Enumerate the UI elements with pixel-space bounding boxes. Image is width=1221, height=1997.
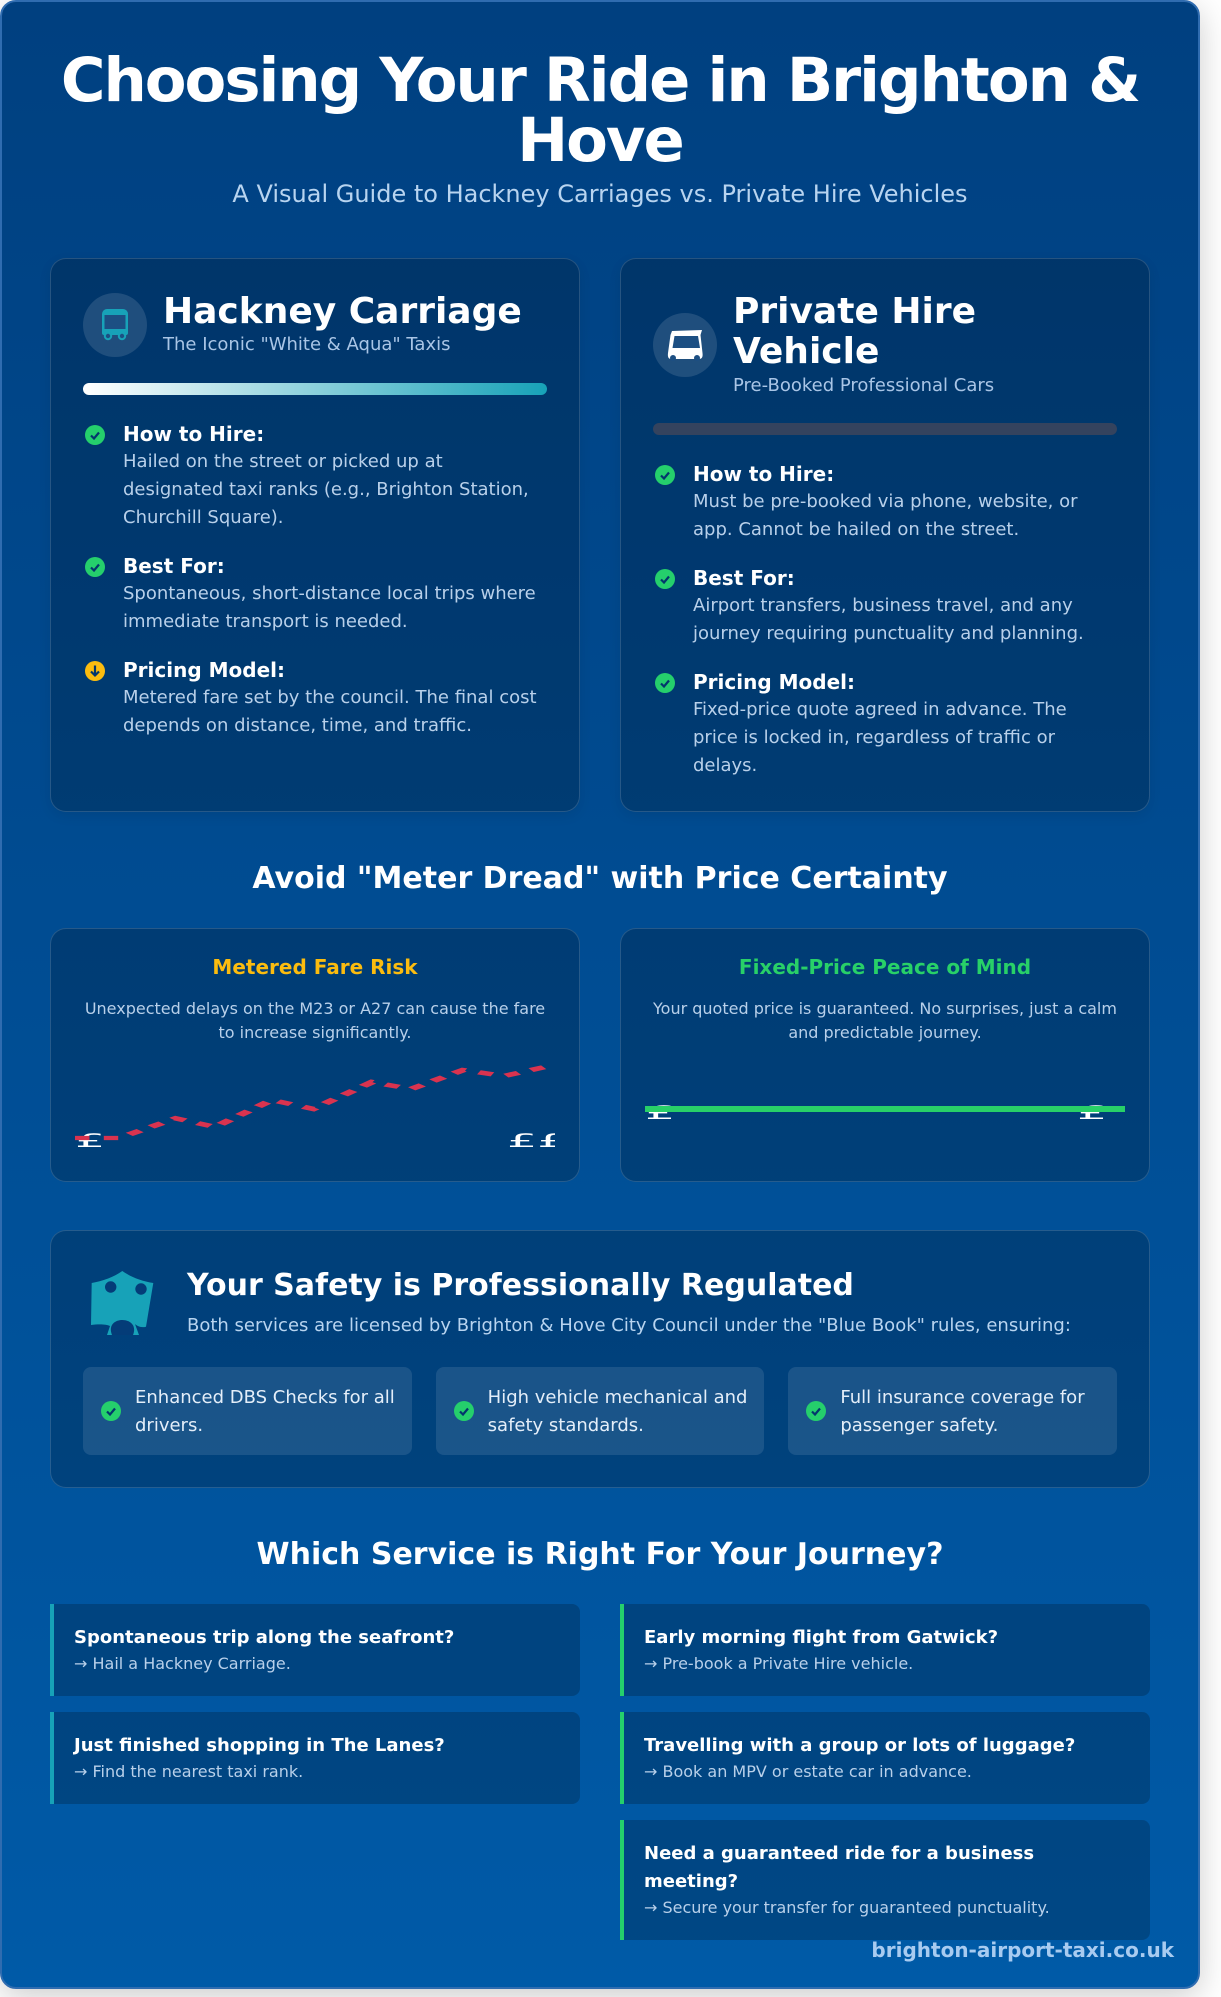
question: Need a guaranteed ride for a business — [644, 1843, 1034, 1864]
section heading: price certainty: Avoid "Meter Dread" with Price Certainty — [252, 861, 948, 896]
start price label: £ — [645, 1101, 675, 1124]
icon: bus — [83, 293, 147, 357]
panel: metered fare risk — [50, 928, 580, 1182]
item: pricing model — [655, 670, 1067, 776]
question: Early morning flight from Gatwick? — [644, 1627, 998, 1648]
heading: Vehicle — [733, 330, 879, 372]
icon: car — [653, 313, 717, 377]
colour bar — [653, 423, 1117, 435]
question: Just finished shopping in The Lanes? — [74, 1735, 445, 1756]
chart: rising fare line — [75, 1065, 555, 1152]
question: Spontaneous trip along the seafront? — [74, 1627, 454, 1648]
panel text: and predictable journey. — [788, 1023, 982, 1042]
description: delays. — [693, 755, 757, 776]
panel text: Unexpected delays on the M23 or A27 can cause the fare — [85, 999, 545, 1018]
colour bar — [83, 383, 547, 395]
description: Must be pre-booked via phone, website, or — [693, 491, 1078, 512]
icon: warning arrow — [85, 661, 105, 681]
icon: check — [85, 557, 105, 577]
text: Enhanced DBS Checks for all — [135, 1387, 395, 1408]
panel: safety — [50, 1230, 1150, 1488]
panel text: to increase significantly. — [218, 1023, 412, 1042]
label: Best For: — [123, 554, 225, 578]
answer: → Find the nearest taxi rank. — [74, 1762, 303, 1781]
description: Hailed on the street or picked up at — [123, 451, 443, 472]
title: Choosing Your Ride in Brighton & — [61, 46, 1139, 116]
panel: private hire vehicle — [620, 258, 1150, 812]
heading: Your Safety is Professionally Regulated — [187, 1268, 854, 1303]
answer: → Book an MPV or estate car in advance. — [644, 1762, 972, 1781]
answer: → Hail a Hackney Carriage. — [74, 1654, 291, 1673]
description: Airport transfers, business travel, and any — [693, 595, 1073, 616]
footer url: brighton-airport-taxi.co.uk — [871, 1938, 1174, 1962]
item: how to hire — [85, 422, 529, 528]
text — [840, 1387, 1085, 1436]
description: Metered fare set by the council. The final cost — [123, 687, 537, 708]
icon: check — [806, 1401, 826, 1421]
end price label: £ — [1077, 1101, 1107, 1124]
text — [135, 1387, 395, 1436]
description: journey requiring punctuality and planning. — [693, 623, 1084, 644]
description: depends on distance, time, and traffic. — [123, 715, 472, 736]
question: Travelling with a group or lots of luggage? — [644, 1735, 1075, 1756]
icon: check — [85, 425, 105, 445]
chart: flat price line — [645, 1101, 1125, 1124]
question — [644, 1843, 1034, 1892]
start price label: £ — [75, 1129, 105, 1152]
item: how to hire — [655, 462, 1078, 540]
scenario: gatwick — [620, 1604, 1150, 1696]
text: Both services are licensed by Brighton & Hove City Council under the "Blue Book" rules, ensuring: — [187, 1315, 1071, 1336]
label: Pricing Model: — [123, 658, 285, 682]
fare line — [75, 1065, 554, 1138]
text: safety standards. — [488, 1415, 644, 1436]
heading: Hackney Carriage — [163, 291, 522, 332]
scenario: business meeting — [620, 1820, 1150, 1940]
description — [123, 583, 536, 632]
description — [693, 491, 1078, 540]
description: Churchill Square). — [123, 507, 284, 528]
heading: Private Hire — [733, 291, 976, 332]
icon: shield — [91, 1271, 154, 1335]
description — [692, 595, 1084, 644]
description: immediate transport is needed. — [123, 611, 408, 632]
text: drivers. — [135, 1415, 203, 1436]
panel heading: Fixed-Price Peace of Mind — [739, 955, 1031, 979]
description — [123, 687, 537, 736]
answer: → Secure your transfer for guaranteed punctuality. — [644, 1898, 1050, 1917]
text — [488, 1387, 747, 1436]
icon: check — [655, 569, 675, 589]
text: passenger safety. — [840, 1415, 998, 1436]
scenario: group — [620, 1712, 1150, 1804]
question: meeting? — [644, 1871, 738, 1892]
description: app. Cannot be hailed on the street. — [693, 519, 1019, 540]
item: best for — [655, 566, 1084, 644]
heading — [733, 291, 976, 372]
panel text: Your quoted price is guaranteed. No surprises, just a calm — [653, 999, 1117, 1018]
scenario: seafront — [50, 1604, 580, 1696]
icon: check — [454, 1401, 474, 1421]
assurance: insurance — [788, 1367, 1117, 1455]
panel: fixed price peace of mind — [620, 928, 1150, 1182]
label: How to Hire: — [693, 462, 834, 486]
text: Full insurance coverage for — [840, 1387, 1085, 1408]
description: designated taxi ranks (e.g., Brighton Station, — [123, 479, 529, 500]
assurance: vehicle standards — [436, 1367, 764, 1455]
scenario: the lanes — [50, 1712, 580, 1804]
description: Fixed-price quote agreed in advance. The — [693, 699, 1067, 720]
icon: check — [101, 1401, 121, 1421]
icon: check — [655, 465, 675, 485]
description — [123, 451, 529, 528]
title: Hove — [517, 106, 683, 176]
label: How to Hire: — [123, 422, 264, 446]
section heading: which service: Which Service is Right For Your Journey? — [257, 1537, 943, 1572]
description — [693, 699, 1067, 776]
label: Best For: — [693, 566, 795, 590]
panel text — [653, 999, 1117, 1042]
answer: → Pre-book a Private Hire vehicle. — [644, 1654, 913, 1673]
panel heading: Metered Fare Risk — [212, 955, 418, 979]
price line — [645, 1106, 1125, 1112]
icon: check — [655, 673, 675, 693]
text: High vehicle mechanical and — [488, 1387, 747, 1408]
title — [61, 46, 1139, 176]
item: best for — [85, 554, 536, 632]
assurance: DBS checks — [83, 1367, 412, 1455]
label: Pricing Model: — [693, 670, 855, 694]
description: Spontaneous, short-distance local trips where — [123, 583, 536, 604]
panel: hackney carriage — [50, 258, 580, 812]
panel text — [85, 999, 545, 1042]
item: pricing model — [85, 658, 537, 736]
subheading: Pre-Booked Professional Cars — [733, 375, 994, 396]
subheading: The Iconic "White & Aqua" Taxis — [163, 334, 450, 355]
subtitle: A Visual Guide to Hackney Carriages vs. Private Hire Vehicles — [232, 180, 968, 208]
description: price is locked in, regardless of traffic or — [693, 727, 1055, 748]
